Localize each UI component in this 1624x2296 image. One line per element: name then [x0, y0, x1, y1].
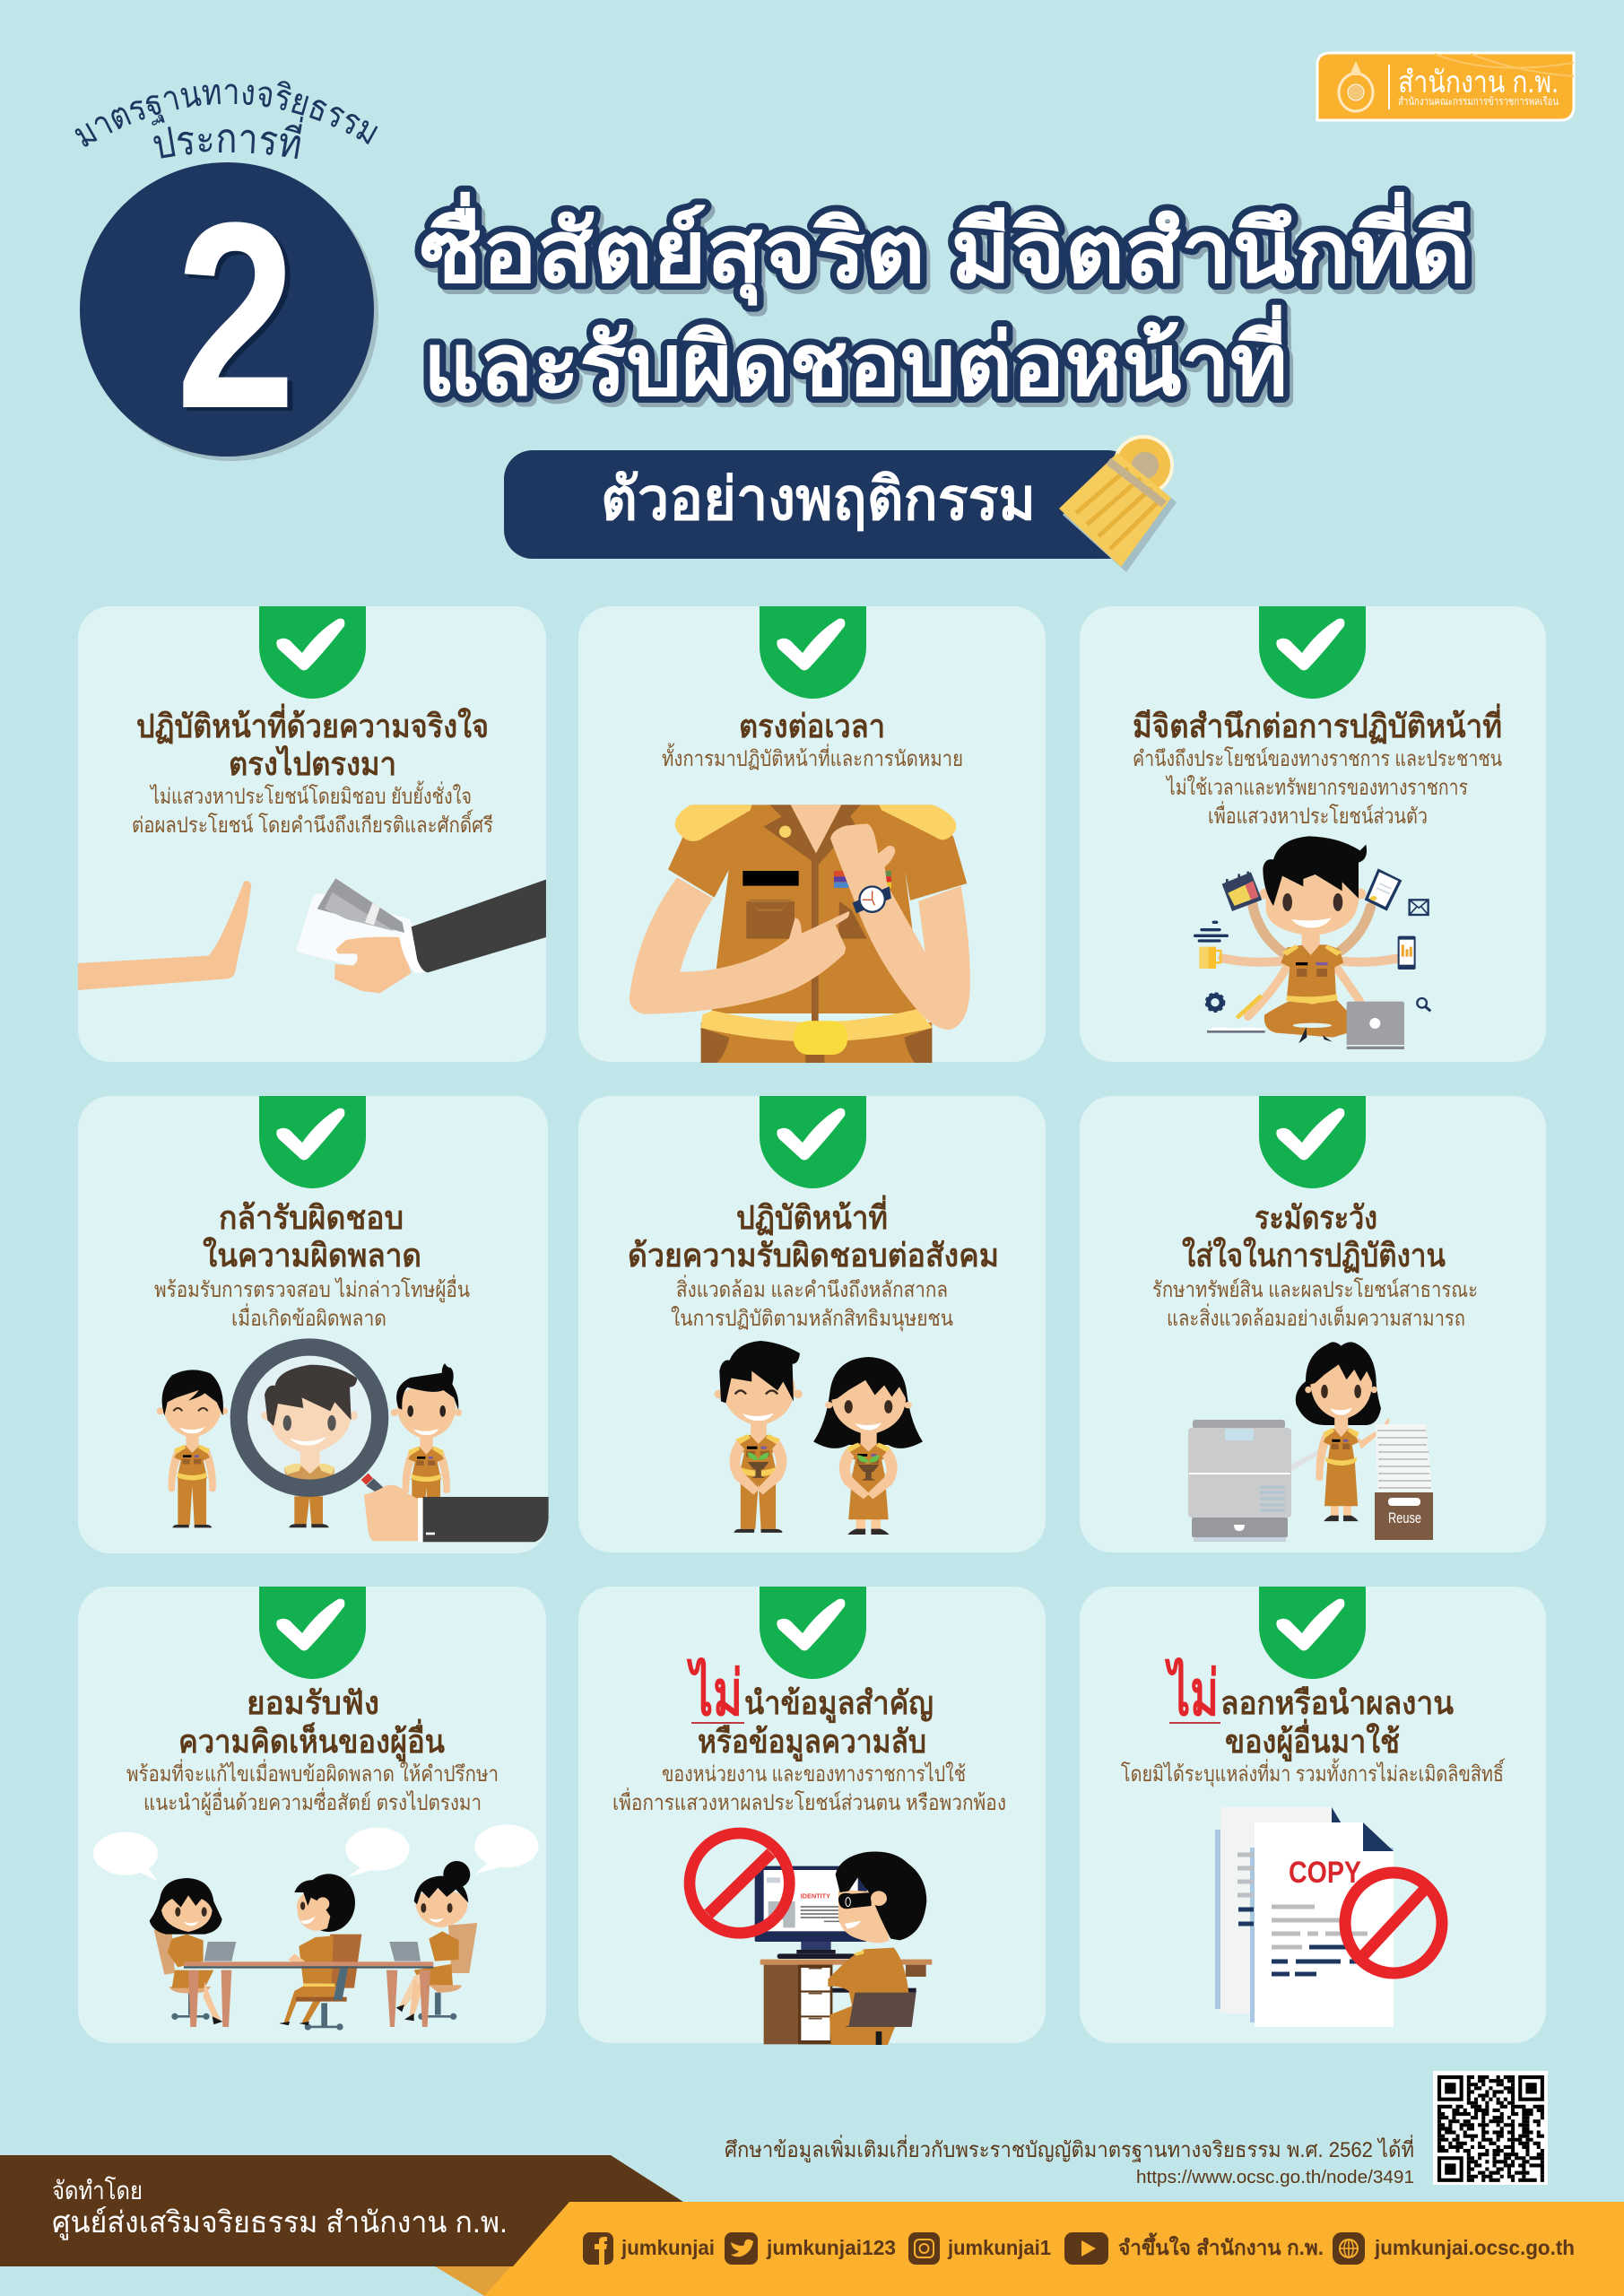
curved label: standard number: มาตรฐานทางจริยธรรม	[75, 81, 378, 147]
section banner	[504, 450, 1136, 559]
icon: check shield	[259, 606, 366, 699]
card 7 body: พร้อมที่จะแก้ไขเมื่อพบข้อผิดพลาด ให้คำปรึกษา	[126, 1759, 499, 1787]
card 9	[1080, 1587, 1546, 2043]
card 5 body: สิ่งแวดล้อม และคำนึงถึงหลักสากล	[676, 1274, 948, 1302]
number badge: 2	[176, 167, 296, 464]
facebook: jumkunjai	[621, 2236, 715, 2259]
card 9 heading	[1164, 1657, 1454, 1762]
logo: OCSC badge	[1317, 53, 1574, 120]
card 2 body: ทั้งการมาปฏิบัติหน้าที่และการนัดหมาย	[662, 743, 963, 771]
illustration: magnifier and hand	[239, 1347, 549, 1542]
card 5 body	[671, 1274, 953, 1332]
number badge: 2	[179, 170, 301, 467]
illustration: left officer	[157, 1370, 228, 1527]
card 9 heading: ลอกหรือนำผลงาน	[1220, 1684, 1454, 1721]
card 8 body: ของหน่วยงาน และของทางราชการไปใช้	[662, 1761, 966, 1787]
icon: epaulette	[1059, 435, 1177, 572]
icon: check shield	[1259, 606, 1366, 699]
card 1 heading	[136, 703, 489, 782]
illustration: copier	[1188, 1420, 1325, 1542]
card 4 heading: กล้ารับผิดชอบ	[219, 1199, 404, 1236]
card 9 body: โดยมิได้ระบุแหล่งที่มา รวมทั้งการไม่ละเมิดลิขสิทธิ์	[1121, 1758, 1506, 1787]
youtube: จำขึ้นใจ สำนักงาน ก.พ.	[1118, 2232, 1324, 2259]
card 6 body: และสิ่งแวดล้อมอย่างเต็มความสามารถ	[1167, 1303, 1465, 1331]
illustration: female officer holding plant	[813, 1357, 923, 1535]
QR code	[1433, 2071, 1548, 2185]
title: ซื่อสัตย์สุจริต มีจิตสำนึกที่ดี	[423, 196, 1474, 310]
card 7 body	[126, 1759, 499, 1816]
card 9 heading: ของผู้อื่นมาใช้	[1225, 1718, 1400, 1762]
section banner: ตัวอย่างพฤติกรรม	[601, 465, 1036, 532]
card 5 body: ในการปฏิบัติตามหลักสิทธิมนุษยชน	[671, 1306, 953, 1332]
card 5	[578, 1096, 1046, 1552]
card 4	[78, 1096, 549, 1553]
card 9 heading: ไม่	[1164, 1657, 1219, 1728]
card 4 heading: ในความผิดพลาด	[203, 1236, 421, 1274]
card 4 body: เมื่อเกิดข้อผิดพลาด	[231, 1303, 386, 1331]
footer band: organiser	[0, 2155, 683, 2266]
title: และรับผิดชอบต่อหน้าที่	[423, 304, 1288, 413]
footer band: orange	[435, 2202, 1624, 2296]
card 1 heading: ตรงไปตรงมา	[229, 744, 396, 782]
logo: OCSC badge: สำนักงานคณะกรรมการข้าราชการพลเรือน	[1398, 95, 1559, 108]
card 6 body: รักษาทรัพย์สิน และผลประโยชน์สาธารณะ	[1152, 1277, 1478, 1302]
card 1 body: ต่อผลประโยชน์ โดยคำนึงถึงเกียรติและศักดิ์ศรี	[132, 809, 493, 838]
card 4 body	[154, 1274, 470, 1331]
twitter: jumkunjai123	[766, 2236, 896, 2259]
card 8 heading: หรือข้อมูลความลับ	[698, 1723, 926, 1762]
card 2	[578, 606, 1046, 1063]
card 8 body: เพื่อการแสวงหาผลประโยชน์ส่วนตน หรือพวกพ้อง	[612, 1787, 1006, 1815]
card 8 heading: นำข้อมูลสำคัญ	[744, 1684, 934, 1724]
card 1 heading: ปฏิบัติหน้าที่ด้วยความจริงใจ	[136, 703, 489, 744]
illustration: prohibited leaking of data	[690, 1833, 932, 2045]
card 7 heading: ความคิดเห็นของผู้อื่น	[178, 1718, 445, 1762]
card 2 heading: ตรงต่อเวลา	[739, 708, 885, 744]
icon: check shield	[760, 606, 866, 699]
card 8 heading	[686, 1657, 934, 1762]
card 7	[78, 1587, 546, 2043]
logo: OCSC badge: สำนักงาน ก.พ.	[1398, 65, 1559, 100]
illustration: prohibited copying	[1215, 1807, 1442, 2027]
icon: check shield	[259, 1587, 366, 1679]
illustration: female officer	[1296, 1342, 1389, 1521]
instagram	[908, 2232, 1051, 2265]
illustration: right officer	[391, 1363, 462, 1529]
card 7 heading: ยอมรับฟัง	[247, 1684, 379, 1721]
facebook	[583, 2232, 715, 2265]
illustration: prohibited copying: COPY	[1289, 1856, 1361, 1890]
social links	[583, 2232, 1575, 2265]
card 3 body	[1133, 746, 1502, 829]
illustration: male officer holding plant	[715, 1341, 803, 1533]
card 4 heading	[203, 1199, 421, 1274]
card 3	[1080, 606, 1546, 1062]
twitter	[725, 2232, 896, 2265]
card 7 body: แนะนำผู้อื่นด้วยความซื่อสัตย์ ตรงไปตรงมา	[143, 1787, 482, 1816]
title: และรับผิดชอบต่อหน้าที่	[427, 309, 1291, 418]
card 3 body: ไม่ใช้เวลาและทรัพยากรของทางราชการ	[1165, 775, 1468, 800]
card 3 heading: มีจิตสำนึกต่อการปฏิบัติหน้าที่	[1133, 703, 1502, 744]
icon: check shield	[1259, 1096, 1366, 1188]
card 6 heading: ใส่ใจในการปฏิบัติงาน	[1182, 1236, 1446, 1274]
illustration: multi-armed officer	[1195, 836, 1430, 1049]
website	[1333, 2232, 1575, 2265]
curved label: standard number: ประการที่	[153, 117, 303, 160]
card 7 heading	[178, 1684, 445, 1762]
card 5 heading	[628, 1195, 999, 1274]
info text: ศึกษาข้อมูลเพิ่มเติมเกี่ยวกับพระราชบัญญัติมาตรฐานทางจริยธรรม พ.ศ. 2562 ได้ที่	[725, 2135, 1414, 2163]
card 1	[78, 606, 546, 1062]
card 6	[1080, 1096, 1546, 1552]
icon: check shield	[259, 1096, 366, 1188]
card 3 body: คำนึงถึงประโยชน์ของทางราชการ และประชาชน	[1133, 746, 1502, 771]
red underline	[1169, 1722, 1220, 1724]
footer band: organiser: จัดทำโดย	[52, 2176, 143, 2205]
illustration: refusing a bribe	[78, 878, 546, 993]
icon: check shield	[760, 1587, 866, 1679]
icon: check shield	[1259, 1587, 1366, 1679]
card 1 body: ไม่แสวงหาประโยชน์โดยมิชอบ ยับยั้งชั่งใจ	[149, 780, 472, 809]
illustration: prohibited leaking of data: IDENTITY	[801, 1894, 830, 1900]
card 8	[578, 1587, 1046, 2045]
card 4 body: พร้อมรับการตรวจสอบ ไม่กล่าวโทษผู้อื่น	[154, 1274, 470, 1303]
card 6 heading	[1182, 1199, 1446, 1274]
illustration: paper stack and reuse box	[1375, 1424, 1433, 1540]
title: ซื่อสัตย์สุจริต มีจิตสำนึกที่ดี	[420, 191, 1471, 306]
icon: check shield	[760, 1096, 866, 1188]
card 6 heading: ระมัดระวัง	[1255, 1199, 1377, 1236]
info text: https://www.ocsc.go.th/node/3491	[1136, 2168, 1414, 2187]
card 5 heading: ด้วยความรับผิดชอบต่อสังคม	[628, 1237, 999, 1274]
youtube	[1064, 2232, 1324, 2265]
info text	[725, 2135, 1414, 2187]
website: jumkunjai.ocsc.go.th	[1374, 2236, 1575, 2259]
illustration: meeting with speech bubbles	[93, 1824, 539, 2031]
card 8 heading: ไม่	[686, 1657, 743, 1728]
instagram: jumkunjai1	[947, 2236, 1051, 2259]
card 5 heading: ปฏิบัติหน้าที่	[736, 1195, 888, 1236]
title	[420, 191, 1474, 418]
card 1 body	[132, 780, 493, 838]
number badge	[80, 162, 378, 467]
red underline	[691, 1722, 744, 1724]
card 3 body: เพื่อแสวงหาประโยชน์ส่วนตัว	[1208, 801, 1428, 829]
card 8 body	[612, 1761, 1006, 1815]
illustration: paper stack and reuse box: Reuse	[1388, 1509, 1421, 1526]
card 6 body	[1152, 1277, 1478, 1331]
footer band: organiser: ศูนย์ส่งเสริมจริยธรรม สำนักงาน ก.พ.	[52, 2205, 508, 2240]
illustration: uniform torso with watch	[630, 804, 970, 1063]
